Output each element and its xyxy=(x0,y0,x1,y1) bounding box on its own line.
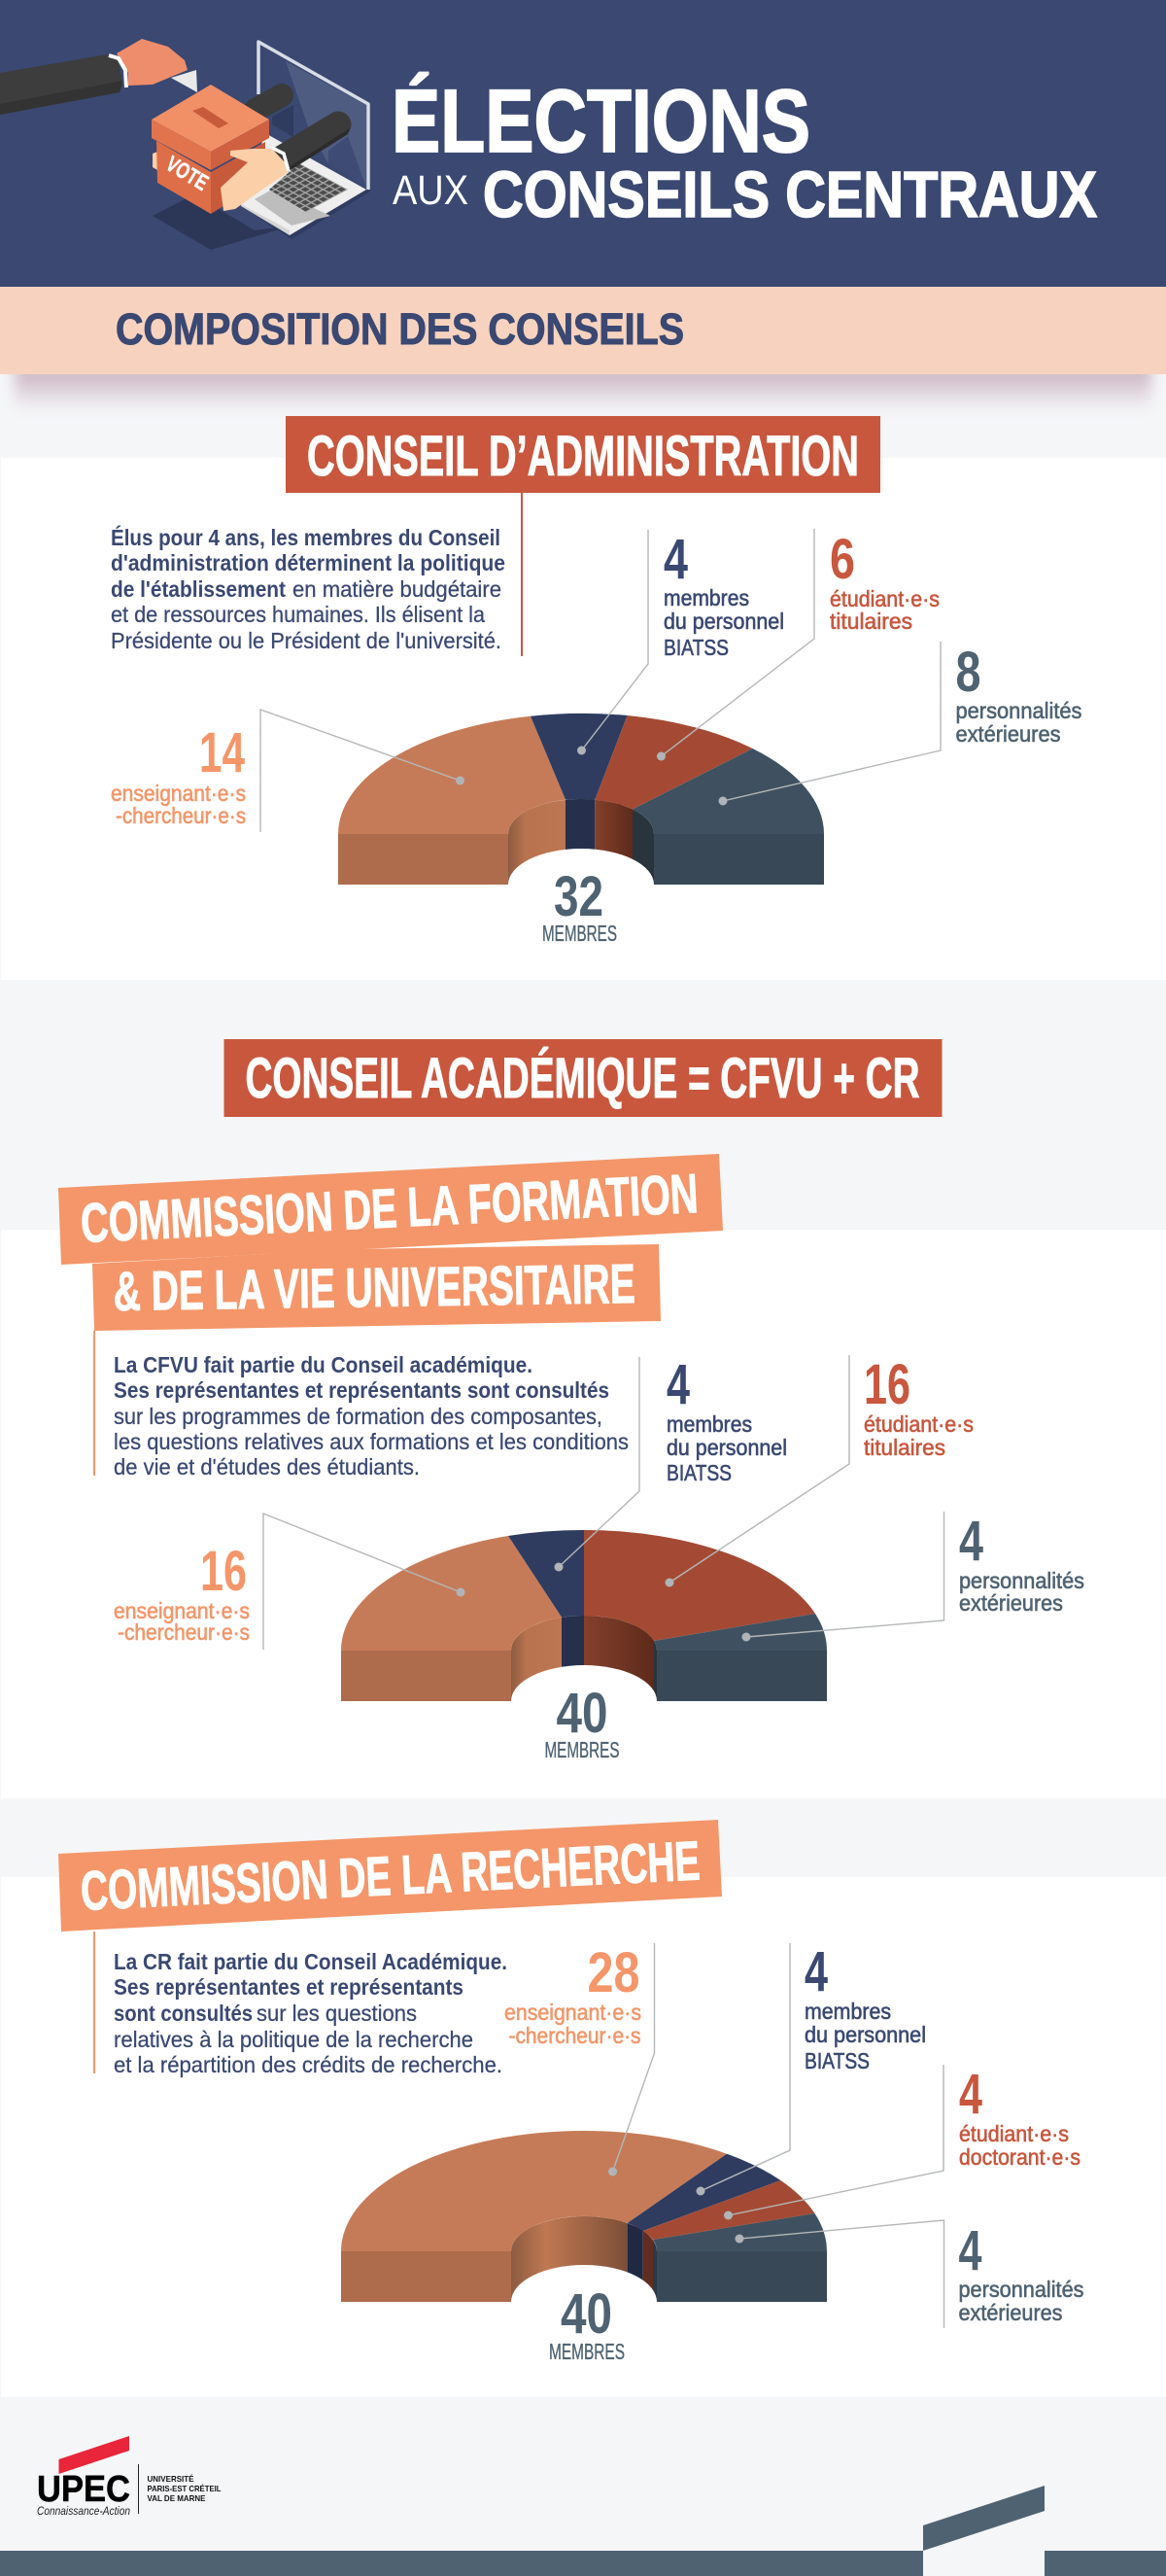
callout: 4 BIATSS: BIATSS xyxy=(664,635,729,660)
text block: sur les questions xyxy=(257,2001,417,2026)
heading: commission de la formation xyxy=(58,1154,723,1331)
callout: 4 personnalités: personnalités xyxy=(958,2277,1084,2302)
text block: Ses représentantes et représentants xyxy=(114,1974,463,2000)
text block: en matière budgétaire xyxy=(292,576,501,602)
chart: 40 members CR xyxy=(341,2131,827,2302)
title: AUX xyxy=(393,167,468,214)
callout: 8 personnalités xyxy=(719,641,1082,805)
callout: 16 enseignants: -chercheur·e·s xyxy=(118,1619,250,1645)
callout: 28 enseignants: -chercheur·e·s xyxy=(509,2023,641,2048)
callout: 16 étudiants: 16 xyxy=(864,1353,910,1416)
text block: Élus pour 4 ans, les membres du Conseil xyxy=(111,524,500,550)
total: 32 membres: MEMBRES xyxy=(542,921,617,946)
total: 40 membres xyxy=(549,2282,625,2364)
callout: 4 BIATSS: du personnel xyxy=(664,609,784,634)
text block: sur les programmes de formation des composantes, xyxy=(114,1404,602,1429)
total: 40 membres: 40 xyxy=(556,1682,608,1745)
panel: CR xyxy=(1,1820,1166,2397)
callout: 8 personnalités: extérieures xyxy=(956,721,1061,747)
text block: sont consultés xyxy=(114,2001,253,2026)
callout: 4 doctorants: doctorant·e·s xyxy=(959,2144,1080,2170)
logo: UPEC: PARIS-EST CRÉTEIL xyxy=(148,2484,222,2493)
callout: 4 doctorants: 4 xyxy=(959,2063,982,2126)
callout: 14 enseignants: 14 xyxy=(199,721,245,784)
callout: 4 personnalités: 4 xyxy=(958,2219,981,2282)
text block: de l'établissement xyxy=(111,576,286,602)
callout: 4 personnalités: extérieures xyxy=(958,2300,1063,2325)
text block xyxy=(114,1352,629,1479)
text block: relatives à la politique de la recherche xyxy=(114,2027,473,2052)
callout: 16 enseignants xyxy=(114,1514,464,1650)
text block: les questions relatives aux formations et les conditions xyxy=(114,1429,629,1454)
illustration: vote box and laptop: VOTE xyxy=(161,151,213,195)
callout: 4 BIATSS: BIATSS xyxy=(805,2048,870,2073)
illustration: vote box and laptop xyxy=(0,39,370,250)
text block: Présidente ou le Président de l'université. xyxy=(111,628,501,653)
panel: CFVU xyxy=(1,1154,1166,1798)
logo: UPEC xyxy=(37,2436,222,2518)
callout: 4 BIATSS xyxy=(696,1940,926,2195)
callout: 8 personnalités: 8 xyxy=(956,641,981,704)
heading: commission de la recherche xyxy=(58,1820,722,1932)
callout: 4 personnalités: personnalités xyxy=(959,1568,1084,1593)
logo: UPEC: UPEC xyxy=(37,2469,130,2510)
callout: 6 étudiants: 6 xyxy=(830,528,855,591)
total: 32 membres: 32 xyxy=(554,865,603,928)
chart: 40 members CFVU xyxy=(341,1530,827,1701)
callout: 6 étudiants: titulaires xyxy=(830,609,912,634)
callout: 28 enseignants: 28 xyxy=(587,1941,639,2004)
total: 40 membres: MEMBRES xyxy=(544,1737,620,1762)
total: 40 membres: 40 xyxy=(561,2282,612,2346)
total: 40 membres xyxy=(544,1682,620,1762)
logo: UPEC: UNIVERSITÉ xyxy=(148,2474,194,2484)
heading: conseil d'administration: CONSEIL D’ADMINISTRATION xyxy=(307,425,859,488)
text block: La CR fait partie du Conseil Académique. xyxy=(114,1949,507,1974)
callout: 14 enseignants xyxy=(111,710,464,832)
heading: commission de la formation: & DE LA VIE UNIVERSITAIRE xyxy=(113,1253,635,1323)
subtitle band xyxy=(0,287,1166,374)
callout: 6 étudiants xyxy=(657,528,940,760)
panel: conseil d'administration xyxy=(1,416,1166,980)
callout: 4 BIATSS xyxy=(554,1353,787,1571)
heading: conseil académique xyxy=(223,1039,943,1117)
callout: 4 BIATSS: membres xyxy=(667,1411,752,1437)
total: 40 membres: MEMBRES xyxy=(549,2339,625,2364)
heading: commission de la recherche: COMMISSION DE LA RECHERCHE xyxy=(79,1829,702,1923)
subtitle band: COMPOSITION DES CONSEILS xyxy=(116,304,684,354)
callout: 4 BIATSS: membres xyxy=(664,585,749,610)
text block: et de ressources humaines. Ils élisent la xyxy=(111,602,485,627)
text block xyxy=(111,524,505,653)
callout: 4 BIATSS xyxy=(577,528,784,754)
chart: 32 members xyxy=(338,714,824,885)
callout: 4 BIATSS: 4 xyxy=(664,528,688,591)
heading: conseil d'administration xyxy=(286,416,880,493)
callout: 16 étudiants: étudiant·e·s xyxy=(864,1411,974,1437)
total: 32 membres xyxy=(542,865,617,946)
callout: 4 personnalités xyxy=(742,1510,1084,1641)
callout: 16 étudiants: titulaires xyxy=(864,1435,945,1460)
callout: 4 personnalités xyxy=(735,2219,1084,2328)
text block: Ses représentantes et représentants sont consultés xyxy=(114,1377,609,1403)
heading: commission de la formation: COMMISSION DE LA FORMATION xyxy=(80,1163,700,1255)
callout: 6 étudiants: étudiant·e·s xyxy=(830,586,940,611)
callout: 4 BIATSS: 4 xyxy=(667,1353,690,1416)
header background xyxy=(0,0,1166,287)
callout: 28 enseignants: enseignant·e·s xyxy=(504,2000,641,2025)
text block: de vie et d'études des étudiants. xyxy=(114,1454,420,1479)
callout: 16 enseignants: enseignant·e·s xyxy=(114,1598,250,1623)
callout: 4 BIATSS: BIATSS xyxy=(667,1460,732,1485)
title: ÉLECTIONS xyxy=(392,71,810,171)
text block: La CFVU fait partie du Conseil académique. xyxy=(114,1352,532,1377)
callout: 16 enseignants: 16 xyxy=(200,1540,247,1603)
callout: 4 doctorants: étudiant·e·s xyxy=(959,2121,1069,2146)
callout: 4 personnalités: 4 xyxy=(959,1510,983,1573)
callout: 4 BIATSS: du personnel xyxy=(805,2022,926,2047)
text block xyxy=(114,1949,507,2077)
callout: 4 BIATSS: du personnel xyxy=(667,1435,787,1460)
band shadow xyxy=(15,365,1151,411)
callout: 8 personnalités: personnalités xyxy=(956,698,1082,723)
callout: 4 personnalités: extérieures xyxy=(959,1590,1063,1616)
text block: et la répartition des crédits de recherche. xyxy=(114,2052,502,2077)
callout: 14 enseignants: -chercheur·e·s xyxy=(116,803,246,828)
title xyxy=(392,71,1097,231)
logo: UPEC: Connaissance-Action xyxy=(37,2504,130,2518)
callout: 4 BIATSS: membres xyxy=(805,1999,891,2024)
logo: UPEC: VAL DE MARNE xyxy=(148,2493,206,2503)
callout: 4 doctorants xyxy=(724,2063,1080,2220)
text block: d'administration déterminent la politique xyxy=(111,550,505,575)
callout: 4 BIATSS: 4 xyxy=(805,1940,828,2003)
callout: 28 enseignants xyxy=(504,1941,655,2176)
footer bar xyxy=(0,2486,1166,2576)
callout: 16 étudiants xyxy=(665,1353,974,1586)
callout: 14 enseignants: enseignant·e·s xyxy=(111,781,246,806)
